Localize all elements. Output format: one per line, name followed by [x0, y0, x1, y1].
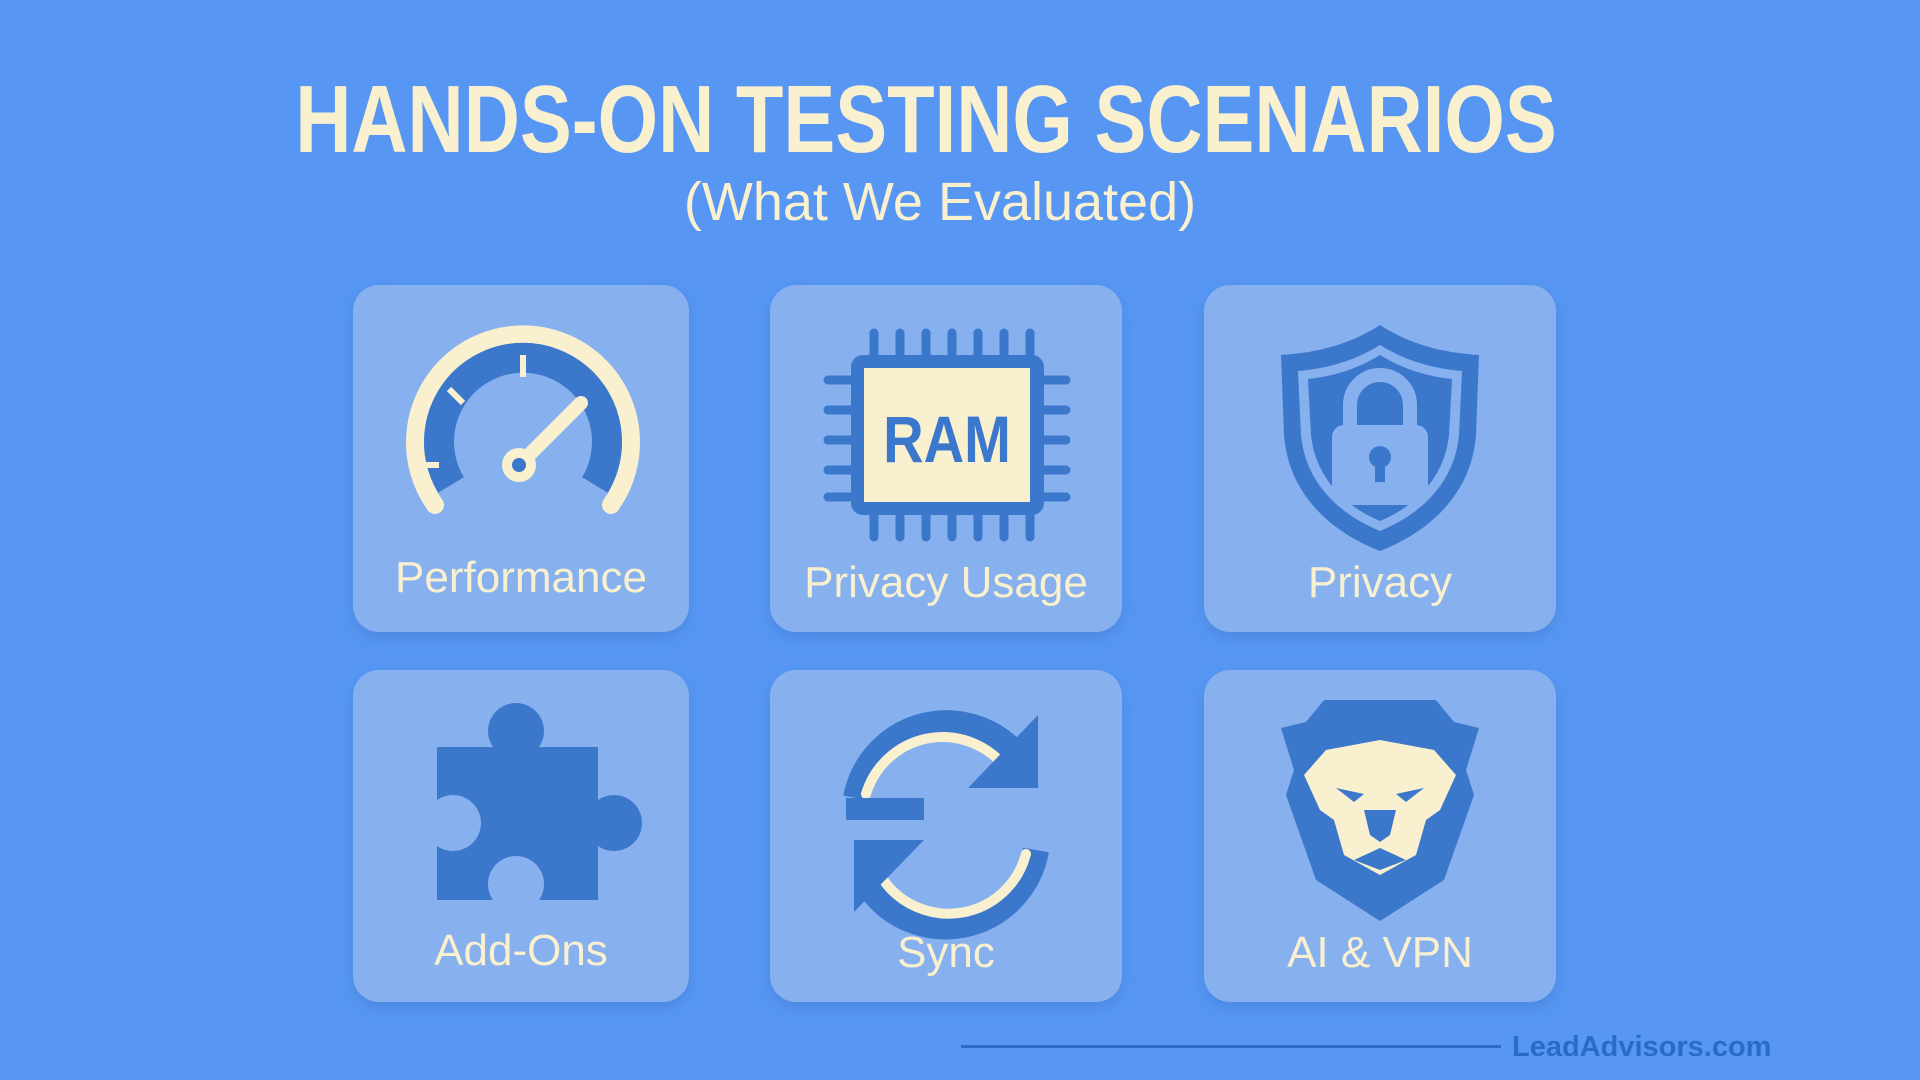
icon: lion shield — [1281, 700, 1479, 921]
panel: sync: Sync — [897, 928, 995, 977]
icon: RAM chip — [824, 328, 1070, 542]
icon: puzzle piece — [437, 703, 642, 900]
panel: AI & VPN — [1204, 670, 1556, 1002]
panel: AI & VPN: AI & VPN — [1287, 928, 1473, 977]
panel: performance: Performance — [395, 553, 647, 602]
panel: privacy usage — [770, 285, 1122, 632]
subtitle: (What We Evaluated) — [684, 172, 1196, 232]
footer brand: LeadAdvisors.com — [1512, 1031, 1771, 1063]
panel: add-ons: Add-Ons — [434, 926, 608, 975]
panel: performance — [353, 285, 689, 632]
panel: privacy: Privacy — [1308, 558, 1452, 607]
panel: sync — [770, 670, 1122, 1002]
title: HANDS-ON TESTING SCENARIOS — [295, 66, 1557, 173]
panel: add-ons — [353, 670, 689, 1002]
icon: shield lock — [1281, 325, 1479, 551]
icon: sync arrows — [843, 710, 1049, 940]
icon: speedometer — [406, 325, 640, 514]
icon: RAM chip: RAM — [883, 403, 1011, 476]
footer line — [961, 1045, 1501, 1048]
panel: privacy — [1204, 285, 1556, 632]
panel: privacy usage: Privacy Usage — [804, 558, 1088, 607]
